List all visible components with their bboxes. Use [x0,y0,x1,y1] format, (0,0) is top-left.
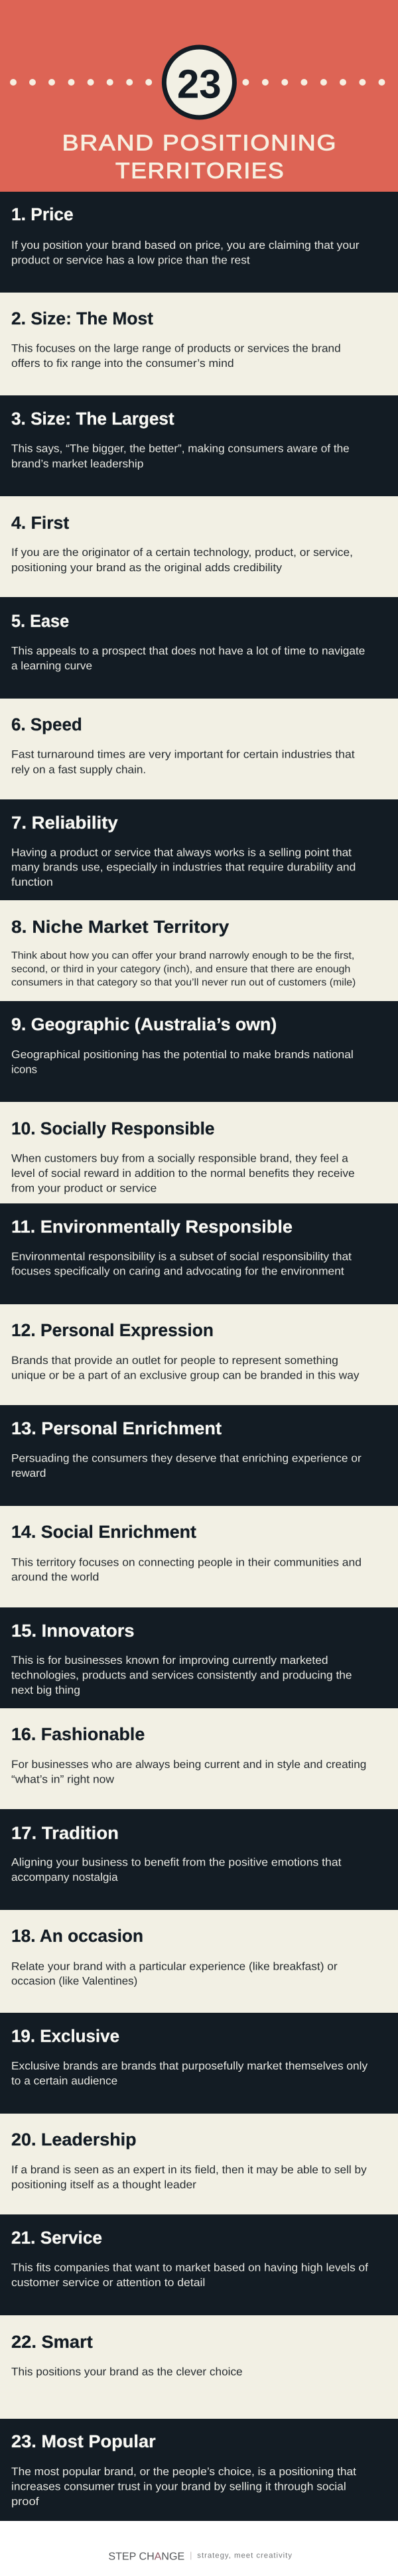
text: personal expression description: unique or be a part of an exclusive group can be branded in this way [11,1369,360,1381]
text: environmental description [11,1250,352,1278]
text: geographic description [11,1048,354,1075]
text: first description: If you are the originator of a certain technology, product, or service, [11,546,353,559]
title [62,131,337,183]
text: size most description [11,342,341,370]
text: most popular description: The most popular brand, or the people’s choice, is a positioning that [11,2465,356,2478]
panel: 7. Reliability [0,799,398,900]
text: size most description: offers to fix range into the consumer’s mind [11,357,234,370]
text: exclusive description [11,2059,368,2087]
panel: 8. Niche Market Territory [0,900,398,1001]
title: TERRITORIES [115,159,285,183]
text: exclusive description: Exclusive brands are brands that purposefully market themselves only [11,2059,368,2072]
panel: 1. Price [0,192,398,293]
text: social enrichment description [11,1556,362,1584]
heading: 22. Smart: 22. Smart [11,2332,93,2352]
heading: 12. Personal Expression: 12. Personal Expression [11,1320,214,1340]
text: socially responsible description: When customers buy from a socially responsible brand, they feel a [11,1152,348,1165]
text: socially responsible description [11,1152,355,1195]
text: niche description: Think about how you can offer your brand narrowly enough to be the first, [11,950,354,961]
heading: 5. Ease: 5. Ease [11,611,69,631]
text: socially responsible description: from your product or service [11,1182,157,1195]
text: service description: customer service or attention to detail [11,2276,205,2289]
text: tradition description: accompany nostalgia [11,1871,118,1883]
text: most popular description: proof [11,2495,39,2508]
heading: 18. An occasion: 18. An occasion [11,1926,143,1946]
text: fashionable description: For businesses who are always being current and in style and creating [11,1758,366,1771]
text: price description [11,239,360,266]
text: fashionable description [11,1758,366,1785]
text: fashionable description: “what’s in” right now [11,1773,115,1785]
text: niche description: second, or third in your category (inch), and ensure that there are enough [11,963,350,975]
heading: 9. Geographic (Australia's own): 9. Geographic (Australia’s own) [11,1014,277,1034]
panel: 23. Most Popular [0,2419,398,2521]
heading: 4. First: 4. First [11,513,69,533]
text: socially responsible description: level of social reward in addition to the normal benefits they receive [11,1167,355,1180]
text: speed description [11,748,355,776]
text: innovators description: next big thing [11,1684,80,1696]
dotted line left [10,79,152,86]
number badge 23 [164,47,234,117]
footer [0,2521,398,2576]
text: geographic description: Geographical positioning has the potential to make brands national [11,1048,354,1061]
heading: 10. Socially Responsible: 10. Socially Responsible [11,1119,215,1138]
text: environmental description: focuses specifically on caring and advocating for the environment [11,1265,344,1278]
panel: 6. Speed [0,699,398,799]
text: exclusive description: to a certain audience [11,2074,117,2087]
text: social enrichment description: around the world [11,1571,99,1584]
text: price description: product or service has a low price than the rest [11,253,250,266]
panel: 16. Fashionable [0,1708,398,1809]
heading: 23. Most Popular: 23. Most Popular [11,2431,156,2451]
panel: 12. Personal Expression [0,1304,398,1405]
text: first description [11,546,353,574]
heading: 6. Speed: 6. Speed [11,714,82,734]
title: BRAND POSITIONING [62,131,337,156]
panel: 18. An occasion [0,1910,398,2013]
text: environmental description: Environmental responsibility is a subset of social responsibility that [11,1250,352,1262]
panel: 5. Ease [0,597,398,699]
heading: 19. Exclusive: 19. Exclusive [11,2026,119,2046]
panel: 11. Environmentally Responsible [0,1203,398,1304]
text: reliability description: Having a product or service that always works is a selling point that [11,846,352,858]
text: size most description: This focuses on the large range of products or services the brand [11,342,341,355]
text: price description: If you position your brand based on price, you are claiming that your [11,239,360,251]
text: smart description: This positions your brand as the clever choice [11,2366,243,2378]
heading: 16. Fashionable: 16. Fashionable [11,1724,145,1744]
text: service description: This fits companies that want to market based on having high levels of [11,2262,368,2274]
heading: 2. Size: The Most: 2. Size: The Most [11,308,153,328]
heading: 14. Social Enrichment: 14. Social Enrichment [11,1522,196,1542]
text: personal enrichment description [11,1452,362,1479]
panel: 4. First [0,496,398,597]
text: personal expression description: Brands that provide an outlet for people to represent something [11,1354,338,1367]
panel: 13. Personal Enrichment [0,1405,398,1506]
heading: 11. Environmentally Responsible: 11. Environmentally Responsible [11,1217,293,1237]
text: personal enrichment description: Persuading the consumers they deserve that enriching experience or [11,1452,362,1465]
panel: 21. Service [0,2214,398,2315]
text: occasion description: occasion (like Valentines) [11,1975,137,1988]
text: tradition description: Aligning your business to benefit from the positive emotions that [11,1856,342,1869]
panel: 15. Innovators [0,1607,398,1708]
text: geographic description: icons [11,1063,37,1075]
text: most popular description: increases consumer trust in your brand by selling it through social [11,2480,346,2493]
text: service description [11,2262,368,2289]
text: innovators description: technologies, products and services consistently and producing the [11,1668,352,1681]
panel: 2. Size: The Most [0,293,398,395]
text: social enrichment description: This territory focuses on connecting people in their communities and [11,1556,362,1568]
footer tagline: strategy, meet creativity [197,2552,292,2560]
text: size largest description: This says, “The bigger, the better”, making consumers aware of the [11,442,350,455]
text: speed description: rely on a fast supply chain. [11,763,146,776]
panel: 20. Leadership [0,2114,398,2214]
heading: 8. Niche Market Territory: 8. Niche Market Territory [11,917,230,937]
text: leadership description: positioning itself as a thought leader [11,2179,196,2191]
heading: 7. Reliability: 7. Reliability [11,813,118,833]
text: occasion description: Relate your brand with a particular experience (like breakfast) or [11,1960,338,1972]
heading: 1. Price: 1. Price [11,204,74,224]
text: speed description: Fast turnaround times are very important for certain industries that [11,748,355,761]
panel: 22. Smart [0,2315,398,2419]
heading: 21. Service: 21. Service [11,2228,102,2248]
text: personal expression description [11,1354,360,1381]
text: personal enrichment description: reward [11,1467,46,1479]
panel: 10. Socially Responsible [0,1102,398,1203]
heading: 3. Size: The Largest: 3. Size: The Largest [11,409,174,429]
text: reliability description [11,846,356,888]
text: innovators description [11,1654,352,1696]
text: size largest description [11,442,350,470]
text: ease description: a learning curve [11,659,92,672]
heading: 20. Leadership: 20. Leadership [11,2130,137,2149]
panel: 17. Tradition [0,1809,398,1910]
text: ease description: This appeals to a prospect that does not have a lot of time to navigate [11,645,365,657]
text: leadership description [11,2163,367,2191]
panel: 9. Geographic [0,1001,398,1102]
header panel [0,0,398,192]
footer divider [190,2551,191,2559]
panel: 19. Exclusive [0,2013,398,2114]
panel: 14. Social Enrichment [0,1506,398,1607]
panel: 3. Size: The Largest [0,395,398,496]
text: leadership description: If a brand is seen as an expert in its field, then it may be able to sell by [11,2163,367,2176]
text: first description: positioning your brand as the original adds credibility [11,561,283,574]
heading: 17. Tradition: 17. Tradition [11,1823,119,1843]
heading: 15. Innovators: 15. Innovators [11,1621,135,1641]
number badge 23: 23 [177,62,222,107]
text: ease description [11,645,365,672]
text: size largest description: brand’s market leadership [11,457,143,470]
text: reliability description: function [11,876,53,888]
footer logo: STEP CHANGE: STEP CHANGE [108,2551,184,2562]
text: innovators description: This is for businesses known for improving currently marketed [11,1654,328,1666]
dotted line right [242,79,385,86]
text: reliability description: many brands use, especially in industries that require durability and [11,861,356,874]
heading: 13. Personal Enrichment: 13. Personal Enrichment [11,1418,222,1438]
text: niche description: consumers in that category so that you’ll never run out of customers (mile) [11,977,356,988]
text: occasion description [11,1960,338,1988]
text: most popular description [11,2465,356,2508]
text: tradition description [11,1856,342,1883]
text: niche description [11,950,356,988]
